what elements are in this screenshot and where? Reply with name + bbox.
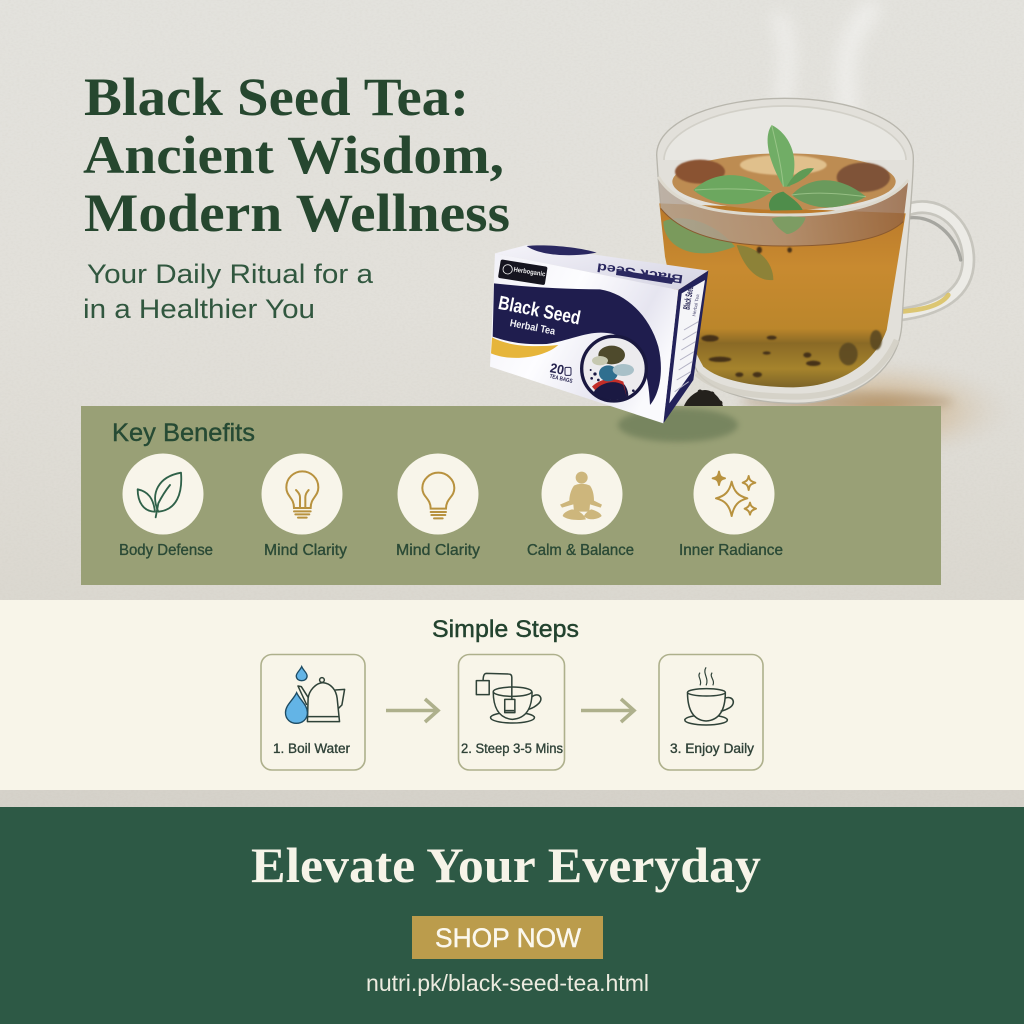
brand label: Herboganic	[513, 266, 546, 278]
step 1: boil water	[261, 654, 365, 770]
tea cup with mint	[657, 98, 968, 412]
product box shadow on panel	[618, 408, 738, 442]
box top face	[495, 245, 708, 290]
benefit: mind clarity, plain bulb: Mind Clarity	[396, 542, 480, 559]
subtitle: in a Healthier You	[83, 294, 315, 324]
step 3: enjoy daily: 3. Enjoy Daily	[670, 741, 754, 756]
box side face: Herbal Tea	[691, 293, 700, 317]
product box: black seed herbal tea	[490, 245, 708, 423]
submerged mint leaves	[663, 218, 735, 253]
benefit: body defense: Body Defense	[119, 542, 213, 559]
benefit: calm and balance: Calm & Balance	[527, 542, 634, 559]
steam rising from the cup	[780, 10, 870, 150]
icon: cup with tea bag	[476, 673, 541, 723]
navy swoosh	[493, 283, 661, 405]
cup handle	[897, 207, 968, 315]
benefit: mind clarity, filament bulb	[262, 454, 347, 559]
box front face: Herbal Tea	[509, 318, 556, 338]
glass base	[697, 340, 897, 397]
band background	[0, 600, 1024, 790]
benefit: inner radiance	[679, 454, 783, 559]
title: Modern Wellness	[84, 183, 510, 243]
arrow: step 2 to 3	[581, 699, 634, 722]
box side face: Black Seed	[681, 285, 695, 310]
step 2: steep: 2. Steep 3-5 Mins	[461, 741, 563, 756]
icon: water drops	[285, 667, 307, 723]
shop now button: SHOP NOW	[435, 923, 582, 953]
benefit: calm and balance	[527, 454, 634, 559]
box front face	[490, 253, 678, 423]
title: Black Seed Tea:	[84, 67, 469, 127]
heading: key benefits: Key Benefits	[112, 419, 255, 447]
yellow swoosh	[491, 337, 558, 358]
black seeds in the tea	[701, 247, 882, 377]
cup glass body	[657, 98, 913, 403]
step 2: steep	[458, 654, 564, 770]
call to action footer	[0, 807, 1024, 1024]
arrow: step 1 to 2	[386, 699, 438, 722]
brand label	[498, 259, 548, 285]
footer background	[0, 807, 1024, 1024]
floating mint leaves	[693, 125, 866, 234]
front rim band	[658, 177, 908, 246]
shop now button	[412, 916, 603, 959]
title	[83, 67, 510, 243]
tea bag count: 20	[549, 360, 565, 378]
subtitle	[83, 259, 374, 324]
box top face: Black Seed	[596, 260, 684, 286]
step 1: boil water: 1. Boil Water	[273, 741, 350, 756]
cup inner rim	[664, 106, 906, 160]
benefit: mind clarity, filament bulb: Mind Clarity	[264, 542, 347, 559]
flower emblem	[582, 336, 646, 401]
website url: nutri.pk/black-seed-tea.html	[366, 970, 649, 996]
product name: Black Seed	[496, 293, 582, 329]
tea liquid	[659, 203, 906, 387]
icon: kettle	[298, 678, 345, 722]
simple steps band	[0, 600, 1024, 790]
spilled black seeds	[684, 390, 723, 406]
footer headline: Elevate Your Everyday	[251, 837, 761, 893]
benefit: mind clarity, plain bulb	[396, 454, 480, 559]
benefit: inner radiance: Inner Radiance	[679, 542, 783, 559]
title: Ancient Wisdom,	[83, 125, 504, 185]
panel background	[81, 406, 941, 585]
icon: steaming cup	[685, 667, 733, 725]
subtitle: Your Daily Ritual for a	[87, 259, 374, 289]
tea surface	[672, 153, 896, 210]
tea bag count	[549, 360, 573, 385]
step 3: enjoy daily	[659, 654, 763, 770]
key benefits panel	[81, 406, 941, 585]
benefit: body defense	[119, 454, 213, 559]
heading: simple steps: Simple Steps	[432, 616, 579, 643]
tea bag count: TEA BAGS	[549, 374, 573, 385]
box side face	[663, 271, 708, 423]
cup shadow	[740, 392, 953, 412]
